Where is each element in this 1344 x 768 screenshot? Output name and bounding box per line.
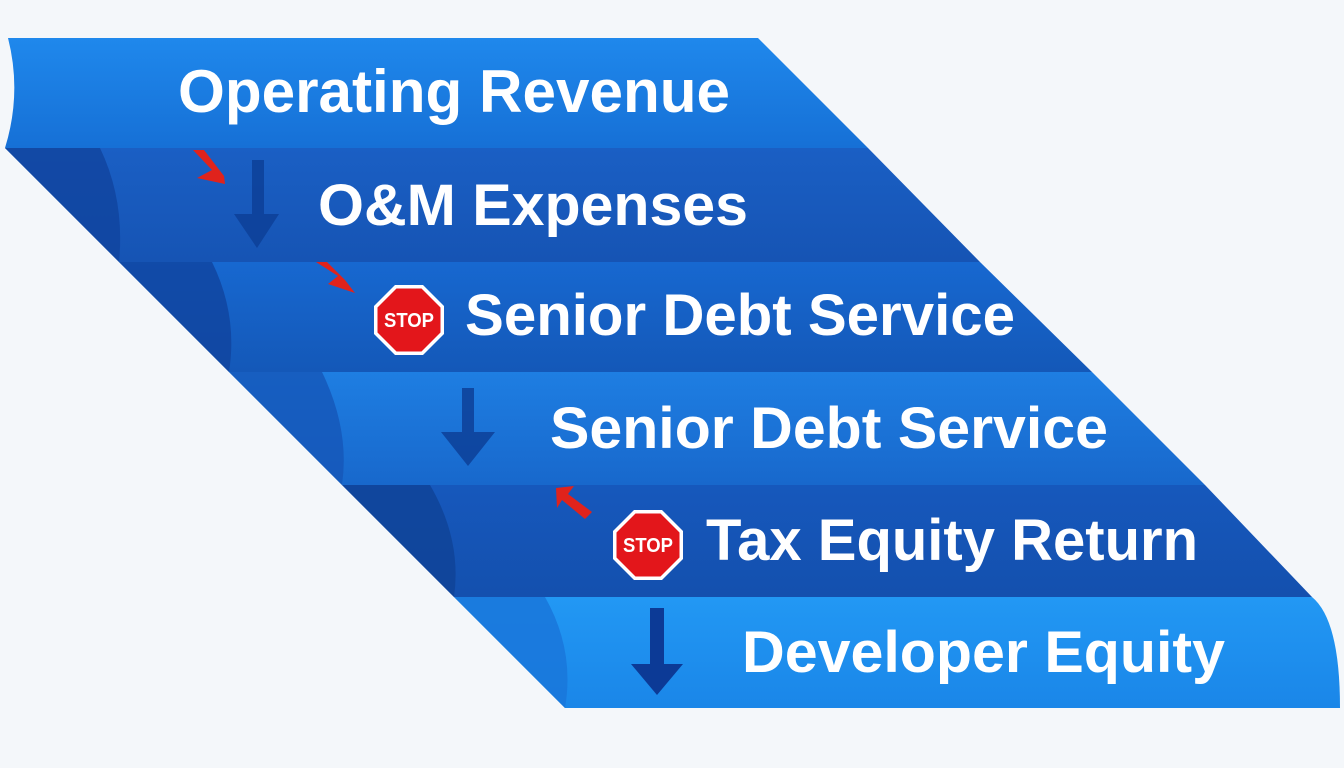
band: Senior Debt Service (2): Senior Debt Service [550, 396, 1108, 461]
band: Senior Debt Service (1): Senior Debt Service [465, 283, 1015, 348]
arrow: red 3 [556, 486, 592, 519]
band: O&M Expenses: O&M Expenses [318, 173, 748, 238]
band: Tax Equity Return [342, 485, 1312, 597]
arrow: down 2 [441, 388, 495, 466]
band: Senior Debt Service (2) [229, 372, 1205, 485]
band: Developer Equity: Developer Equity [742, 620, 1225, 685]
arrow: red 1 [193, 150, 225, 184]
icon: stop sign 1: STOP [384, 310, 434, 332]
band: O&M Expenses [5, 148, 980, 262]
icon: stop sign 1 [374, 285, 444, 355]
band: Tax Equity Return: Tax Equity Return [706, 508, 1198, 573]
band: Senior Debt Service (1) [119, 262, 1092, 372]
icon: stop sign 2 [613, 510, 683, 580]
icon: stop sign 2: STOP [623, 535, 673, 557]
arrow: down 3 [631, 608, 683, 695]
band: Operating Revenue: Operating Revenue [178, 58, 730, 125]
band: Developer Equity [454, 597, 1340, 708]
band: Operating Revenue [5, 38, 868, 148]
arrow: down 1 [234, 160, 279, 248]
arrow: red 2 [316, 262, 355, 293]
